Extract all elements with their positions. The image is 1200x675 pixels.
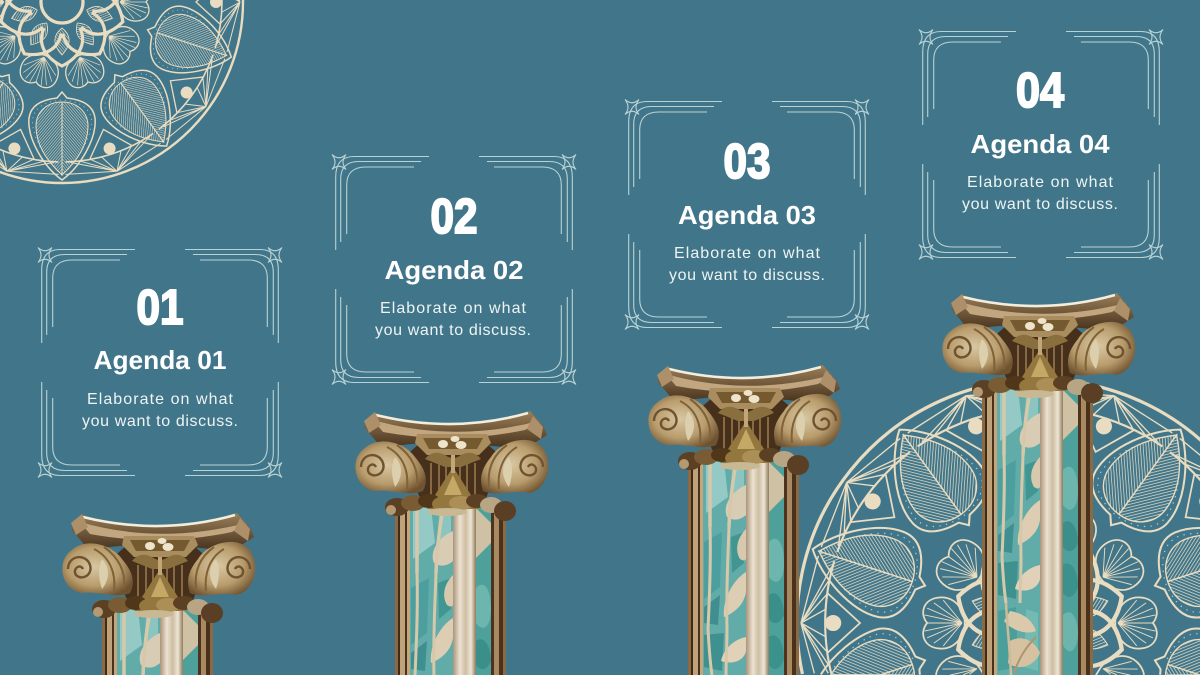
column 1 — [62, 513, 255, 675]
description 03: Elaborate on what — [674, 245, 821, 262]
frame 03 — [625, 100, 869, 330]
description 01: you want to discuss. — [82, 413, 238, 430]
frame 01 — [38, 248, 282, 478]
column 2 — [355, 411, 548, 675]
number 03: 03 — [724, 135, 770, 189]
description 01 — [82, 391, 238, 430]
mandala: bottom right — [790, 341, 1200, 675]
heading 04: Agenda 04 — [970, 129, 1110, 159]
description 03: you want to discuss. — [669, 267, 825, 284]
description 02: Elaborate on what — [380, 300, 527, 317]
column 3 — [648, 365, 841, 675]
panel: agenda 01 — [38, 248, 282, 478]
number 04: 04 — [1016, 64, 1064, 118]
panel: agenda 02 — [332, 154, 576, 384]
frame 02 — [332, 154, 576, 384]
panel: agenda 04 — [919, 30, 1163, 260]
description 02 — [375, 300, 531, 339]
mandala: top left — [0, 0, 269, 212]
description 02: you want to discuss. — [375, 322, 531, 339]
heading 02: Agenda 02 — [384, 255, 524, 285]
description 03 — [669, 245, 825, 284]
column 4 — [942, 293, 1135, 675]
description 01: Elaborate on what — [87, 391, 234, 408]
description 04 — [962, 174, 1118, 213]
description 04: you want to discuss. — [962, 196, 1118, 213]
heading 01: Agenda 01 — [94, 345, 226, 375]
number 02: 02 — [430, 190, 478, 244]
number 01: 01 — [136, 281, 184, 335]
heading 03: Agenda 03 — [678, 200, 816, 230]
frame 04 — [919, 30, 1163, 260]
panel: agenda 03 — [625, 100, 869, 330]
description 04: Elaborate on what — [967, 174, 1114, 191]
